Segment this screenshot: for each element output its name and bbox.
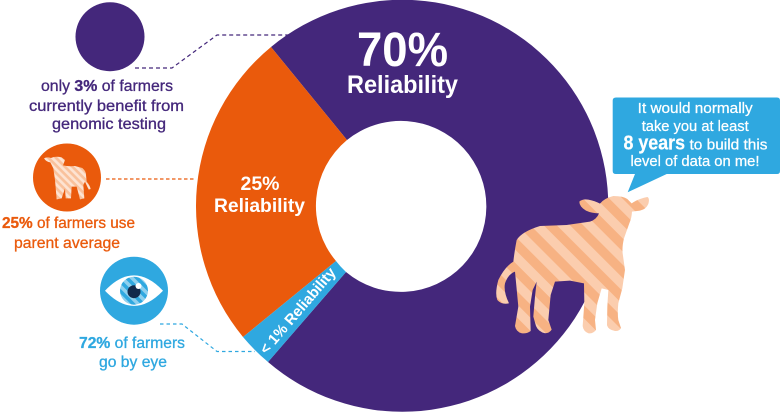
heading: 70% reliability: Reliability [347,71,458,99]
speech bubble text: take you at least [642,118,750,135]
speech bubble text: It would normally [638,100,753,117]
text: only 3% of farmers: genomic testing [52,116,166,133]
heading: 25% reliability [214,174,305,217]
heading: 70% reliability [347,24,458,99]
speech bubble [613,98,780,192]
icon: orange circle with lamb [33,144,101,212]
speech bubble text: level of data on me! [630,153,760,170]
segment: 70% reliability [268,0,608,412]
text: 72% of farmers go by eye [79,335,185,371]
dashed connector: blue [160,324,255,352]
text: only 3% of farmers [29,78,184,133]
dashed connector: purple [135,35,290,68]
icon: eye [100,257,168,325]
speech bubble text: to build this [690,136,768,154]
text: 25% of farmers use parent average: 25% of farmers use [2,215,135,232]
heading: 70% reliability: 70% [357,24,448,77]
heading: 25% reliability: 25% [240,174,280,195]
text: 25% of farmers use parent average [2,215,135,252]
text: only 3% of farmers: currently benefit from [29,98,184,115]
label: under 1% reliability: < 1% Reliability [257,264,340,358]
text: 25% of farmers use parent average: parent average [14,235,120,252]
dashed connector: orange [106,178,196,180]
donut chart [196,0,608,412]
segment: 25% reliability [196,47,347,337]
text: 72% of farmers go by eye: go by eye [99,354,167,371]
speech bubble text [624,100,768,170]
icon: purple circle [76,2,144,71]
text: only 3% of farmers: only 3% of farmers [41,78,173,95]
heading: 25% reliability: Reliability [214,196,305,217]
illustration: striped lamb [496,196,649,333]
segment: under 1% reliability [243,261,346,362]
speech bubble text: 8 years [624,132,685,154]
text: 72% of farmers go by eye: 72% of farmers [79,335,185,352]
